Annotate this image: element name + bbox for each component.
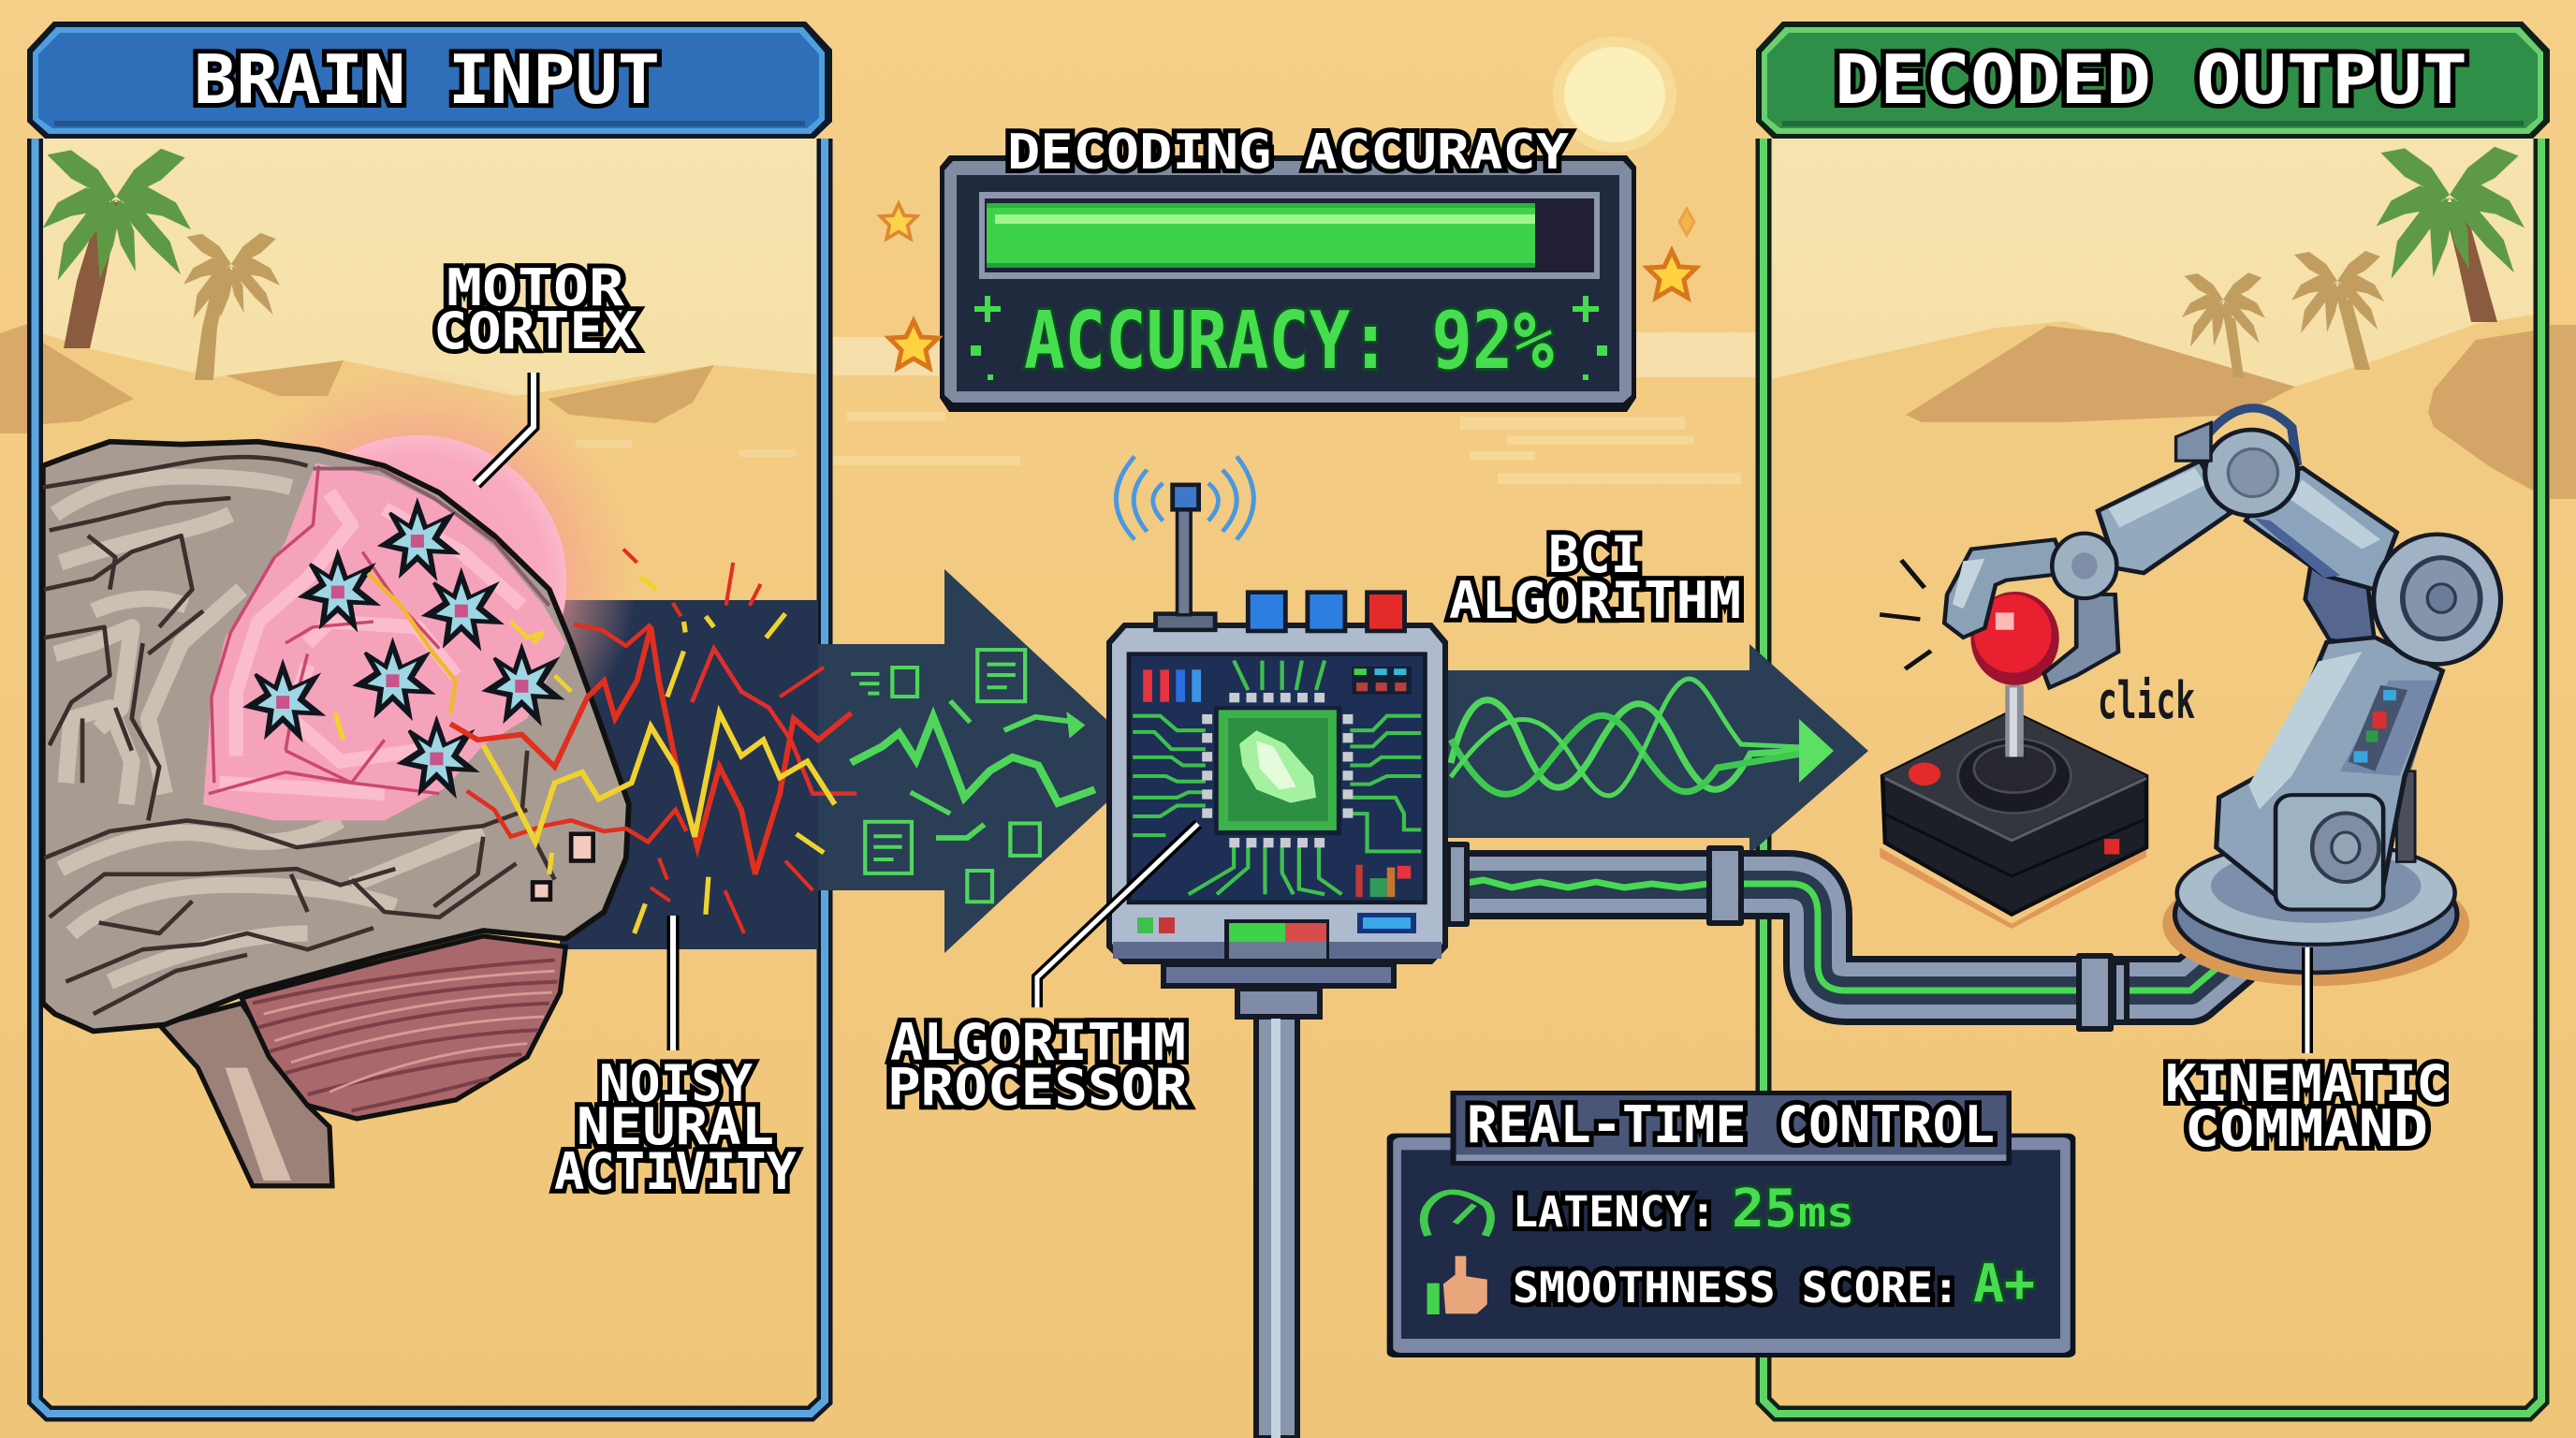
label: algorithm processor bbox=[887, 1013, 1189, 1117]
label: motor cortex bbox=[433, 258, 637, 360]
header: brain input: BRAIN INPUT bbox=[194, 40, 660, 119]
antenna bbox=[1116, 456, 1253, 630]
pipe: output cable to robot bbox=[1446, 844, 2232, 1029]
signal sparks bbox=[623, 550, 824, 933]
indicator buttons bbox=[1248, 593, 1405, 631]
icon: thumbs up bbox=[1427, 1256, 1487, 1314]
motor cortex highlight halo bbox=[268, 435, 566, 727]
metric: latency: 25 bbox=[1732, 1179, 1797, 1240]
label: kinematic command: KINEMATIC bbox=[2165, 1054, 2448, 1113]
icon: gold stars bbox=[880, 204, 1696, 368]
header: decoded output bbox=[1756, 22, 2550, 139]
gripper bbox=[1944, 534, 2118, 687]
neurons bbox=[381, 503, 456, 577]
label: noisy neural activity: NOISY bbox=[599, 1054, 753, 1113]
label: decoding accuracy: DECODING ACCURACY bbox=[1007, 125, 1570, 181]
processor pole bbox=[1164, 964, 1394, 1438]
cerebellum bbox=[242, 936, 565, 1119]
upper arm bbox=[2246, 468, 2396, 590]
progress bar bbox=[979, 192, 1600, 279]
brain stem bbox=[159, 1004, 332, 1186]
noisy neural signal traces bbox=[368, 573, 856, 874]
label: kinematic command: COMMAND bbox=[2185, 1099, 2428, 1158]
leader line: motor cortex bbox=[476, 373, 534, 484]
label: noisy neural activity: NEURAL bbox=[577, 1097, 774, 1156]
brain illustration bbox=[43, 366, 856, 1186]
joystick bbox=[1880, 560, 2146, 929]
title tab bbox=[1450, 1091, 2012, 1166]
metric: latency bbox=[1513, 1179, 1854, 1240]
cerebrum bbox=[43, 442, 629, 1031]
label: kinematic command bbox=[2165, 1054, 2448, 1158]
green decoded trace and data icons bbox=[851, 650, 1095, 902]
status leds bbox=[2349, 685, 2408, 771]
motor cortex pink region bbox=[203, 463, 565, 820]
arrow: clean signal to output bbox=[1446, 644, 1868, 854]
scene inside left panel bbox=[43, 139, 817, 457]
robot arm bbox=[1944, 408, 2501, 986]
label: motor cortex: MOTOR bbox=[446, 258, 625, 317]
dunes outside the panels bbox=[0, 324, 2576, 499]
status bars bbox=[1143, 667, 1412, 702]
elbow joint with hose bbox=[2176, 408, 2298, 516]
label: algorithm processor: ALGORITHM bbox=[890, 1013, 1186, 1072]
small pink cells at brain front bbox=[533, 834, 593, 900]
base joint bbox=[2276, 795, 2383, 910]
label: BCI algorithm bbox=[1449, 525, 1741, 630]
shoulder joint gear bbox=[2374, 535, 2501, 664]
label: motor cortex: CORTEX bbox=[433, 301, 637, 360]
front panel controls bbox=[1137, 913, 1416, 961]
header: brain input bbox=[27, 22, 832, 139]
panel: decoding accuracy bbox=[940, 125, 1636, 412]
label: BCI algorithm: ALGORITHM bbox=[1449, 571, 1741, 630]
metric: smoothness score: SMOOTHNESS SCORE: bbox=[1513, 1263, 1959, 1313]
label: algorithm processor: PROCESSOR bbox=[887, 1058, 1189, 1117]
header: decoded output: DECODED OUTPUT bbox=[1835, 40, 2467, 119]
leader line: kinematic command bbox=[2302, 947, 2313, 1053]
title: real-time control: REAL-TIME CONTROL bbox=[1467, 1095, 1995, 1154]
horizon haze bbox=[833, 332, 1756, 377]
icon: palm trees left bbox=[43, 149, 280, 380]
panel: real-time control bbox=[1387, 1091, 2075, 1357]
cables bbox=[2399, 690, 2432, 862]
pipe couplings bbox=[1448, 844, 2127, 1029]
metric: smoothness score: A+ bbox=[1973, 1254, 2035, 1314]
forearm bbox=[2098, 461, 2230, 573]
red ball handle bbox=[1970, 592, 2059, 685]
sparkle accents bbox=[971, 296, 1607, 380]
leader line: algorithm processor bbox=[1037, 824, 1198, 1007]
accuracy value: ACCURACY: 92% bbox=[1024, 295, 1554, 388]
metric: latency: ms bbox=[1798, 1189, 1854, 1237]
leader line: noisy neural activity bbox=[666, 916, 680, 1050]
circuit traces bbox=[1133, 661, 1421, 894]
icon: sun bbox=[1553, 37, 1676, 153]
label: noisy neural activity bbox=[554, 1054, 797, 1201]
processor box bbox=[1106, 456, 1448, 964]
base bbox=[2174, 842, 2457, 973]
decoded sine waves bbox=[1451, 679, 1834, 796]
arrow: raw signal into processor bbox=[818, 569, 1151, 953]
mini chart on board bbox=[1355, 865, 1411, 897]
shadow bbox=[1880, 847, 2146, 929]
base shadow bbox=[2162, 862, 2469, 986]
gyri light bbox=[55, 477, 483, 982]
label: click: click bbox=[2098, 671, 2195, 730]
gyri dark lines bbox=[43, 457, 555, 1014]
central chip bbox=[1214, 706, 1341, 835]
label: BCI algorithm: BCI bbox=[1548, 525, 1642, 584]
icon: palm trees right bbox=[2182, 147, 2525, 377]
metric: smoothness score bbox=[1513, 1254, 2035, 1314]
panel: brain input frame bbox=[27, 22, 832, 1414]
icon: speedometer bbox=[1424, 1192, 1491, 1236]
soft glow behind motor cortex bbox=[198, 366, 637, 797]
lower arm bbox=[2217, 638, 2442, 895]
click motion ticks bbox=[1880, 560, 1931, 669]
scene inside right panel bbox=[1772, 139, 2535, 506]
panel: decoded output frame bbox=[1756, 22, 2550, 1414]
metric: latency: LATENCY: bbox=[1513, 1187, 1716, 1237]
chip pins bbox=[1202, 693, 1353, 847]
label: noisy neural activity: ACTIVITY bbox=[554, 1142, 797, 1201]
dark band behind noisy signal bbox=[560, 600, 818, 949]
connector between upper and lower arm bbox=[2305, 565, 2375, 647]
